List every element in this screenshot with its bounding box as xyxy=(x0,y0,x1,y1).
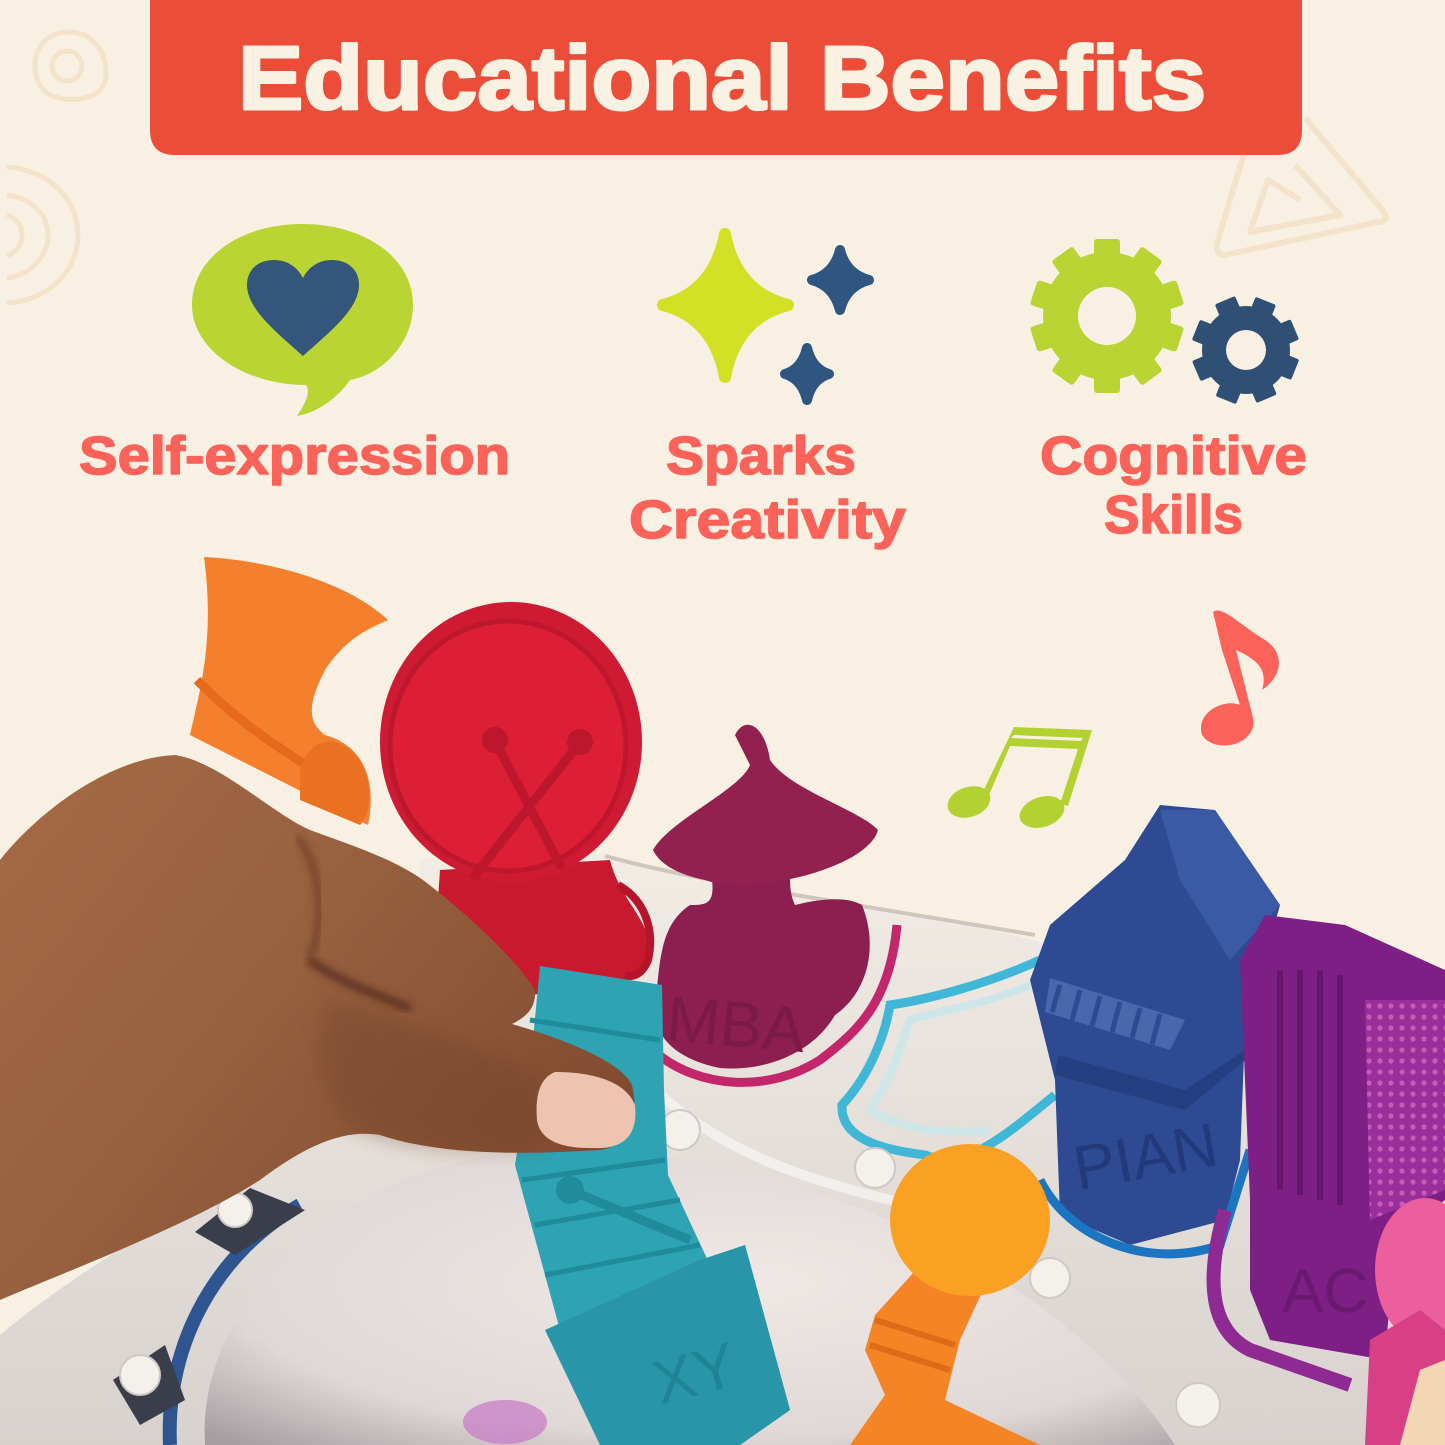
icon: speech bubble with heart xyxy=(192,224,413,416)
photo: purple accordion xyxy=(1214,915,1445,1385)
photo: orange trumpet xyxy=(850,1144,1050,1445)
photo: teal xylophone xyxy=(515,966,790,1445)
photo: pink toy xyxy=(1365,1198,1445,1445)
icon: sparkles xyxy=(663,234,869,400)
label: cognitive skills xyxy=(1040,426,1307,545)
photo: maroon cymbal xyxy=(653,725,897,1082)
label: cognitive skills: Cognitive xyxy=(1040,426,1307,486)
icon: green music notes xyxy=(943,727,1092,833)
thumb shadow xyxy=(320,1000,540,1150)
decorative doodle: top left swirl xyxy=(35,32,106,99)
clear pool xyxy=(205,1150,1175,1445)
pink reflection xyxy=(463,1400,547,1444)
label: sparks creativity: Sparks xyxy=(666,426,856,486)
icon: red music note xyxy=(1201,611,1279,746)
title: Educational Benefits xyxy=(238,29,1206,129)
photo: red drum xyxy=(380,602,650,1015)
label: sparks creativity: Creativity xyxy=(629,490,906,550)
title banner xyxy=(150,0,1302,155)
photo: blue piano: PIAN xyxy=(1068,1111,1223,1204)
knuckle crease xyxy=(298,838,319,960)
tray pegs xyxy=(120,1110,1220,1427)
blue rim xyxy=(170,1205,300,1445)
label: sparks creativity xyxy=(629,426,906,550)
thumbnail xyxy=(537,1072,635,1148)
icon: gears xyxy=(1030,239,1299,404)
photo: hand xyxy=(0,755,635,1300)
label: cognitive skills: Skills xyxy=(1104,485,1243,545)
photo: purple accordion: AC xyxy=(1282,1257,1368,1326)
photo: clear toy tray xyxy=(0,854,1445,1445)
cyan slot xyxy=(842,960,1055,1159)
photo: teal xylophone: XY xyxy=(646,1330,744,1419)
decorative doodle: top right triangle xyxy=(1217,118,1386,255)
decorative doodle: left arcs xyxy=(7,167,78,303)
photo: blue piano xyxy=(1030,805,1280,1254)
photo: maroon cymbal: MBA xyxy=(664,982,809,1066)
finger crease xyxy=(312,962,408,1008)
label: self-expression: Self-expression xyxy=(79,426,510,486)
photo: orange tuba xyxy=(190,557,388,825)
